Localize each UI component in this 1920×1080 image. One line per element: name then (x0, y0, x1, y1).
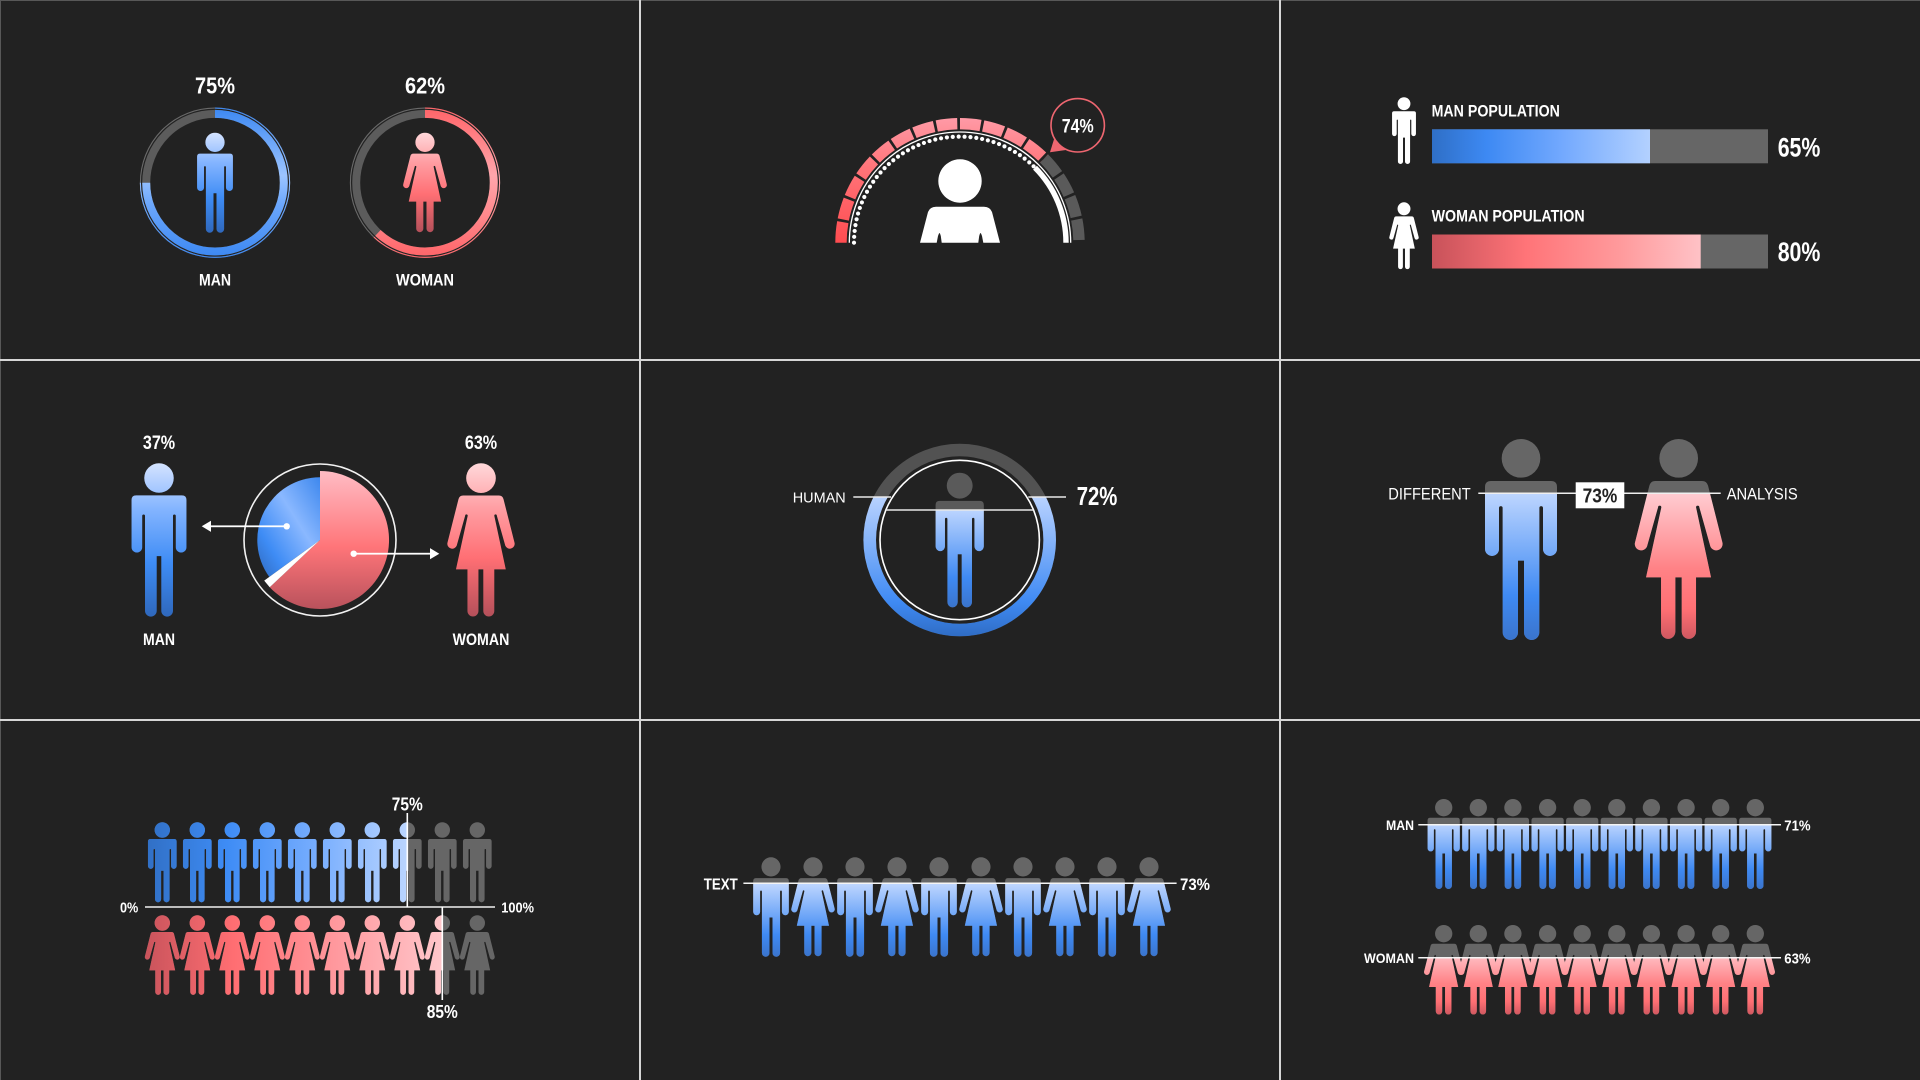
value: 37%: 37% (143, 432, 175, 454)
value: 73%: 73% (1180, 876, 1210, 894)
icon: woman (447, 463, 515, 617)
panel: pie split man and woman (132, 432, 515, 649)
level line: men (1418, 824, 1781, 826)
row: women 63% (1424, 925, 1775, 1015)
label: 73% box: 73% (1583, 486, 1618, 508)
value: 75%: 75% (195, 72, 235, 98)
icon: woman white (1389, 202, 1419, 269)
level lines (853, 497, 1066, 510)
gauge: dotted progress (854, 137, 1035, 243)
label: WOMAN: WOMAN (1364, 950, 1414, 966)
label: MAN: MAN (199, 271, 231, 290)
gauge: filled red segments (841, 124, 1044, 243)
label: woman population: WOMAN POPULATION (1432, 208, 1585, 226)
icon: man fill 73% (1485, 439, 1557, 640)
arrow: to woman (350, 548, 439, 559)
ring: woman 62% (350, 108, 500, 257)
label: HUMAN: HUMAN (793, 490, 846, 507)
gauge: solid remainder (1035, 168, 1066, 243)
arrow: to man (202, 521, 290, 532)
label: DIFFERENT: DIFFERENT (1388, 485, 1471, 503)
label: TEXT: TEXT (704, 876, 738, 893)
row: women 85% (144, 915, 495, 995)
gauge: remaining gray segments (1044, 159, 1079, 243)
label: MAN: MAN (1386, 817, 1414, 833)
panel: alternating people row (704, 857, 1210, 957)
value: 71%: 71% (1784, 818, 1811, 834)
ring: man 75% (140, 108, 290, 257)
marker lines (407, 813, 442, 1000)
callout: 74% bubble: 74% (1062, 117, 1094, 138)
icon: man white (1392, 97, 1416, 164)
row: men 75% (148, 822, 492, 902)
row: people 73% (753, 857, 1171, 957)
level line: women (1418, 957, 1781, 959)
level line (1478, 492, 1721, 494)
label: 0%: 0% (120, 900, 138, 916)
panel: semicircular gauge (841, 99, 1104, 243)
icon: woman (403, 133, 447, 232)
bar: woman 80% (1432, 234, 1768, 268)
panel: pictogram rows with scale (120, 795, 534, 1022)
row: men 71% (1428, 799, 1771, 889)
value: 63%: 63% (465, 432, 497, 454)
value: 85%: 85% (427, 1002, 458, 1022)
icon: man (132, 463, 186, 617)
ring: gray and blue (870, 450, 1050, 630)
label: 73% box (1576, 482, 1624, 508)
scale axis (145, 906, 495, 908)
icon: woman fill 73% (1635, 439, 1723, 639)
label: WOMAN: WOMAN (396, 271, 454, 290)
level line (743, 882, 1177, 884)
value: 65%: 65% (1778, 132, 1820, 162)
panel: men and women rows (1364, 799, 1811, 1015)
panel: human 72% ring (793, 450, 1117, 630)
gauge: thin inner arc (849, 132, 1071, 243)
label: 100%: 100% (501, 900, 534, 916)
value: 75%: 75% (392, 795, 423, 815)
label: man population: MAN POPULATION (1432, 103, 1560, 121)
callout: 74% bubble (1050, 99, 1104, 152)
label: MAN: MAN (143, 630, 175, 649)
panel: population bars (1389, 97, 1820, 269)
pie chart (244, 464, 396, 616)
value: 63%: 63% (1784, 952, 1811, 968)
label: WOMAN: WOMAN (453, 630, 509, 649)
icon: man fill 72% (936, 473, 984, 607)
label: ANALYSIS: ANALYSIS (1727, 485, 1798, 503)
panel: man and woman percentage rings (140, 72, 500, 290)
icon: man (197, 133, 233, 233)
bar: man 65% (1432, 129, 1768, 163)
value: 72%: 72% (1077, 483, 1117, 511)
panel: different analysis (1388, 439, 1798, 640)
icon: person bust (920, 159, 1000, 243)
value: 62%: 62% (405, 72, 445, 98)
value: 80%: 80% (1778, 237, 1820, 267)
